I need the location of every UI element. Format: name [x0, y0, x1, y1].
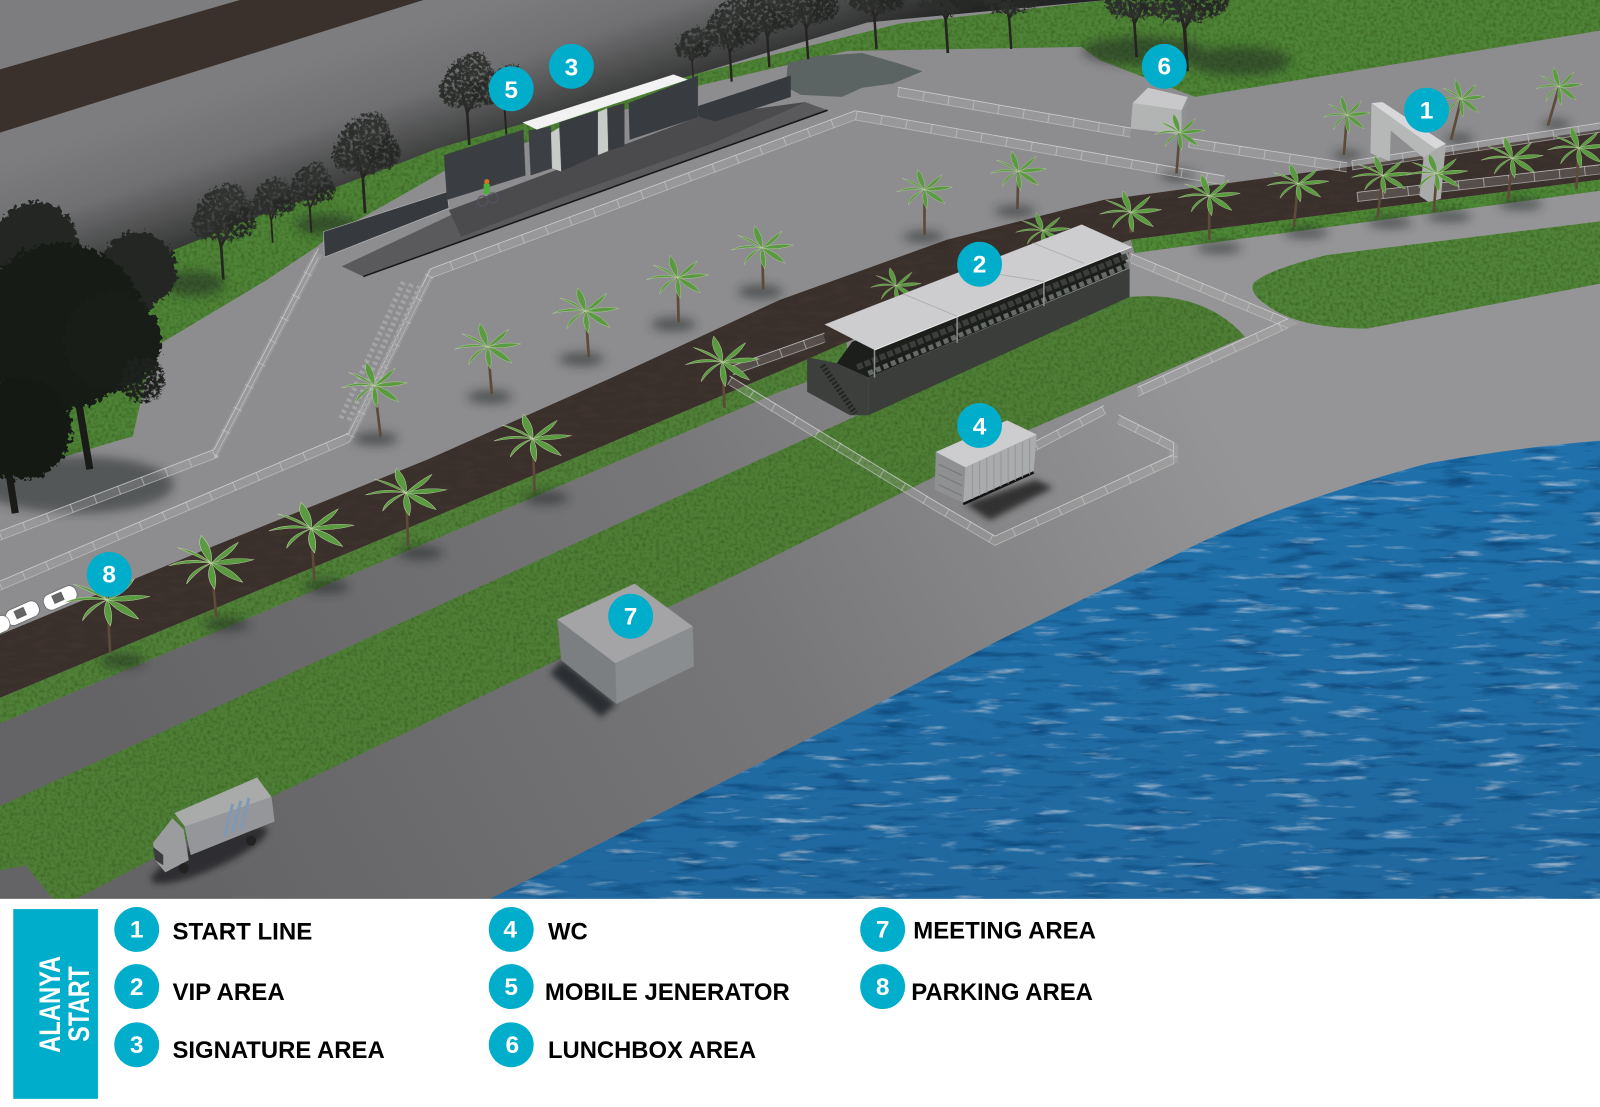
- lunchbox tent: [1131, 88, 1188, 135]
- legend labels: SIGNATURE AREA: [172, 1037, 385, 1064]
- legend labels: MEETING AREA: [913, 918, 1096, 945]
- ground shadows: [0, 37, 1570, 668]
- upper grey slope: [0, 0, 1107, 347]
- legend numbers: 6: [505, 1032, 519, 1059]
- dark forest at left: [0, 202, 177, 513]
- sea: [490, 441, 1600, 899]
- start arch: [1370, 102, 1446, 202]
- marker 6: 6: [1157, 53, 1171, 80]
- marker 4: [957, 403, 1002, 448]
- icon: cyclist: [478, 179, 498, 206]
- marker 7: [608, 594, 653, 639]
- marker 7: 7: [624, 603, 637, 630]
- marker 3: [549, 44, 594, 89]
- palm trees: [64, 67, 1600, 653]
- bike rack: [341, 281, 420, 422]
- parked cars: [0, 583, 79, 640]
- marker badges on the map: [87, 44, 1449, 639]
- legend labels: [172, 918, 1096, 1064]
- marker 6: [1142, 44, 1187, 89]
- marker 5: 5: [504, 77, 518, 104]
- signature wall: [323, 74, 791, 257]
- legend panel: [0, 899, 1600, 1107]
- legend title block: [13, 909, 98, 1099]
- deciduous trees on the belt: [192, 0, 1230, 280]
- marker 4: 4: [973, 414, 987, 441]
- legend labels: LUNCHBOX AREA: [548, 1037, 756, 1064]
- brown cycling road: [0, 130, 1600, 698]
- legend title block: START: [63, 966, 96, 1042]
- signature area ramp: [342, 102, 828, 276]
- fences: [0, 87, 1600, 590]
- marker 5: [489, 66, 534, 111]
- legend numbers: 2: [130, 974, 144, 1001]
- legend numbers: [114, 907, 905, 1067]
- large grass strip: [0, 296, 1245, 899]
- legend numbers: 1: [130, 917, 144, 944]
- right grass patch: [1253, 221, 1600, 329]
- upper grass belt: [0, 0, 1600, 477]
- legend labels: VIP AREA: [172, 979, 285, 1006]
- legend numbers: 3: [130, 1032, 144, 1059]
- legend labels: WC: [548, 919, 588, 946]
- marker 2: 2: [973, 251, 986, 278]
- legend labels: PARKING AREA: [911, 979, 1093, 1006]
- legend labels: START LINE: [172, 919, 312, 946]
- WC trailer: [935, 420, 1053, 520]
- pond: [786, 53, 922, 97]
- legend numbers: 4: [503, 917, 517, 944]
- legend numbers: 8: [876, 974, 889, 1001]
- meeting area box: [550, 584, 694, 717]
- grass strip beside road: [0, 342, 847, 723]
- legend title block: ALANYA: [34, 956, 67, 1053]
- lower grey road: [0, 191, 1600, 899]
- marker 8: [87, 552, 132, 597]
- marker 1: [1404, 88, 1449, 133]
- legend numbers: 5: [504, 974, 518, 1001]
- VIP tribune: [807, 224, 1132, 415]
- palms behind the tribune: [871, 213, 1070, 303]
- legend numbers: 7: [876, 917, 889, 944]
- truck: [146, 777, 274, 894]
- brown road at top left: [0, 0, 423, 133]
- marker 2: [957, 242, 1002, 287]
- legend labels: MOBILE JENERATOR: [545, 979, 790, 1006]
- marker 1: 1: [1420, 97, 1433, 124]
- marker 8: 8: [102, 562, 116, 589]
- marker 3: 3: [565, 55, 578, 82]
